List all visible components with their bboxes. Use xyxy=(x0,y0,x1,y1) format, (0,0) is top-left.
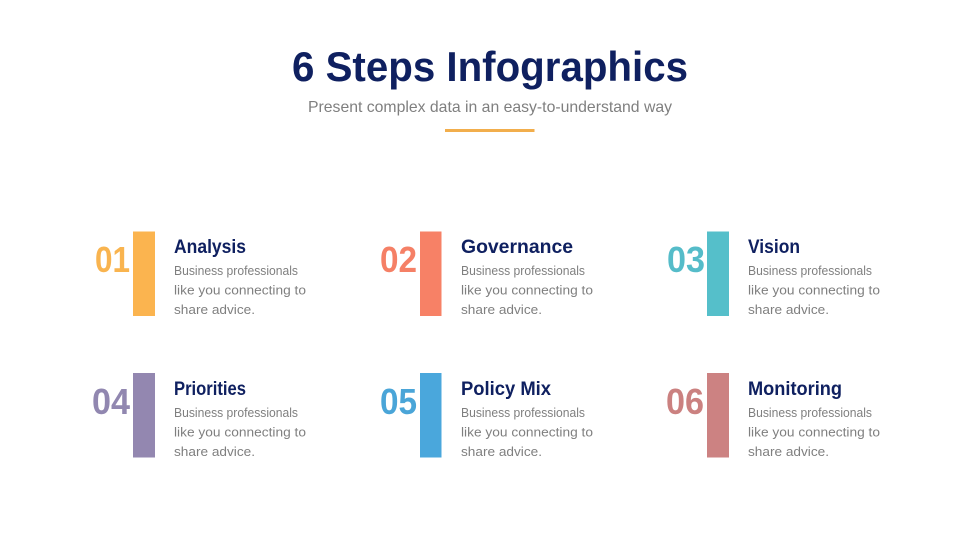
title accent rule xyxy=(445,129,534,132)
description 06: like you connecting to xyxy=(748,424,880,440)
panel: step 06 Monitoring xyxy=(666,373,880,459)
number 03: 03 xyxy=(667,239,705,280)
description 02: share advice. xyxy=(461,302,542,317)
description 03: share advice. xyxy=(748,302,829,317)
description 01: share advice. xyxy=(174,302,255,317)
heading: Monitoring: Monitoring xyxy=(748,378,842,400)
panel: step 03 Vision xyxy=(667,232,880,317)
accent bar 06 xyxy=(707,373,729,458)
description 06: share advice. xyxy=(748,444,829,459)
description 01 xyxy=(174,263,306,317)
accent bar 03 xyxy=(707,232,729,316)
heading: Vision: Vision xyxy=(748,236,800,258)
panel: step 05 Policy Mix xyxy=(380,373,593,459)
number 02: 02 xyxy=(380,239,417,280)
description 05: share advice. xyxy=(461,444,542,459)
heading: Governance: Governance xyxy=(461,236,573,258)
description 03 xyxy=(748,263,880,317)
description 03: Business professionals xyxy=(748,263,872,278)
heading: Policy Mix: Policy Mix xyxy=(461,378,551,400)
panel: step 01 Analysis xyxy=(95,232,306,317)
panel: step 02 Governance xyxy=(380,232,593,317)
description 04: Business professionals xyxy=(174,405,298,420)
heading: Analysis: Analysis xyxy=(174,236,246,258)
description 04: share advice. xyxy=(174,444,255,459)
number 01: 01 xyxy=(95,239,130,280)
description 01: Business professionals xyxy=(174,263,298,278)
accent bar 05 xyxy=(420,373,442,458)
description 01: like you connecting to xyxy=(174,282,306,298)
accent bar 01 xyxy=(133,232,155,316)
number 04: 04 xyxy=(92,381,130,422)
accent bar 02 xyxy=(420,232,442,316)
description 05 xyxy=(461,405,593,459)
accent bar 04 xyxy=(133,373,155,458)
number 05: 05 xyxy=(380,381,417,422)
description 04: like you connecting to xyxy=(174,424,306,440)
description 05: like you connecting to xyxy=(461,424,593,440)
number 06: 06 xyxy=(666,381,704,422)
description 04 xyxy=(174,405,306,459)
panel: step 04 Priorities xyxy=(92,373,306,459)
description 02: Business professionals xyxy=(461,263,585,278)
description 06: Business professionals xyxy=(748,405,872,420)
description 03: like you connecting to xyxy=(748,282,880,298)
description 02 xyxy=(461,263,593,317)
description 05: Business professionals xyxy=(461,405,585,420)
description 06 xyxy=(748,405,880,459)
subtitle: Present complex data in an easy-to-understand way xyxy=(308,99,672,116)
heading: Priorities: Priorities xyxy=(174,378,246,400)
title: 6 Steps Infographics xyxy=(292,43,688,90)
description 02: like you connecting to xyxy=(461,282,593,298)
